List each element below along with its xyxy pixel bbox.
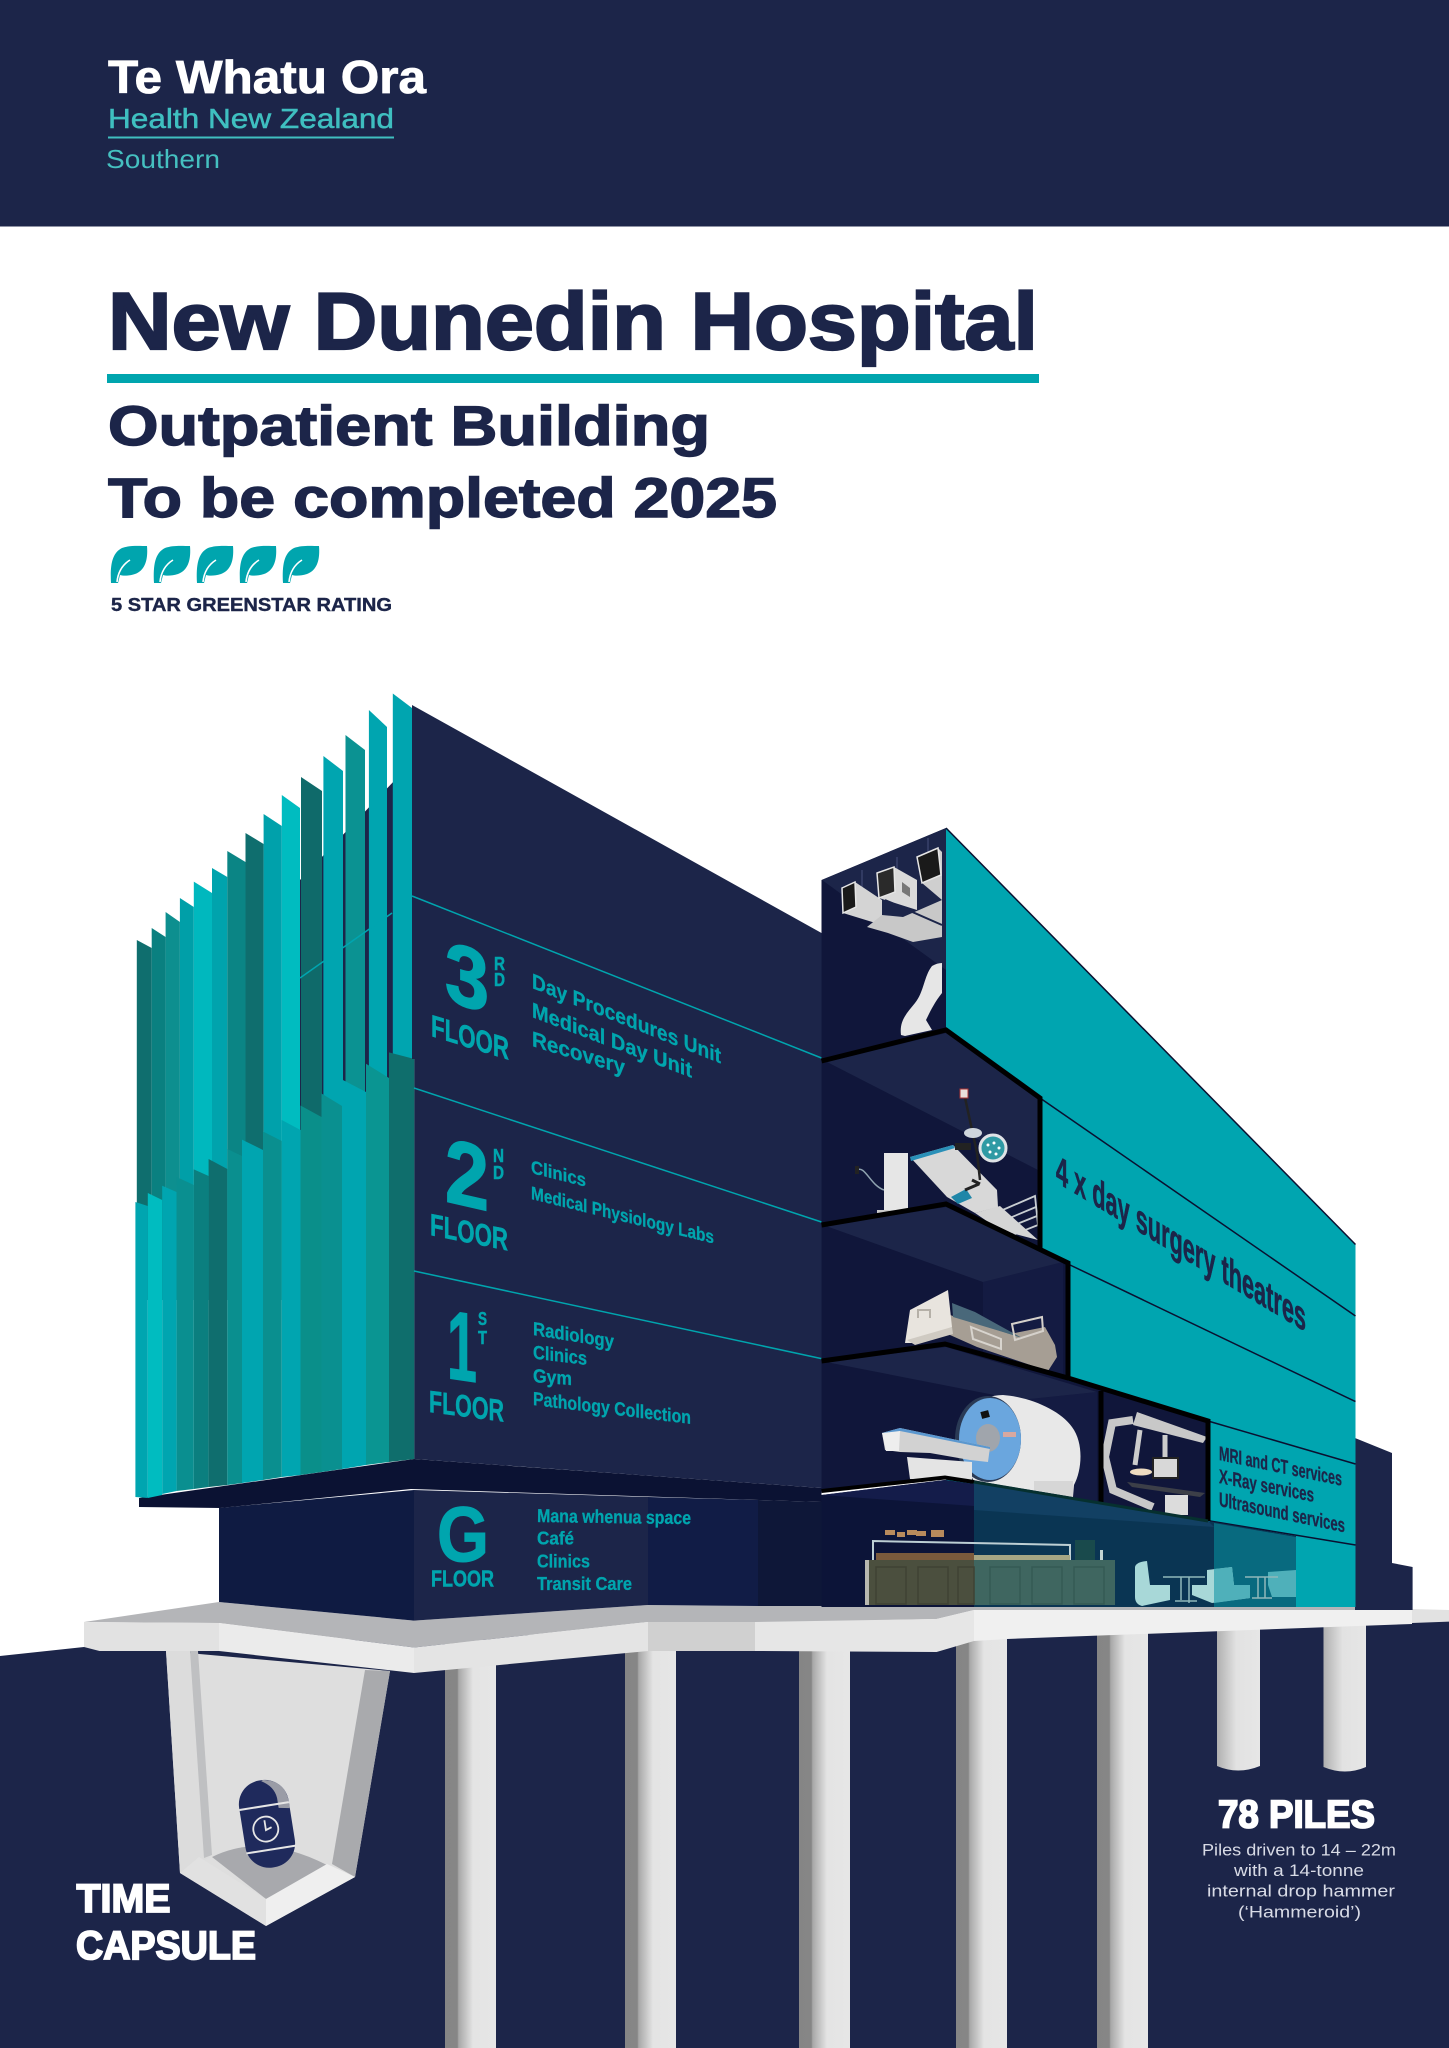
ground floor services	[537, 1505, 691, 1594]
callout: imaging services: MRI and CT services	[1219, 1443, 1342, 1491]
text block: pile description: internal drop hammer	[1207, 1883, 1396, 1901]
title block: To be completed 2025	[108, 466, 777, 529]
first floor label: 1	[447, 1289, 477, 1403]
main navy wall	[412, 705, 822, 1488]
ground floor label: FLOOR	[431, 1566, 494, 1592]
logo: Southern	[106, 144, 220, 174]
building underside	[139, 1459, 822, 1508]
callout: imaging services: X-Ray services	[1219, 1466, 1314, 1507]
text block: pile description: (‘Hammeroid’)	[1238, 1904, 1361, 1922]
room: plant level with ducts	[822, 828, 946, 1061]
ground floor services: Mana whenua space	[537, 1505, 691, 1528]
second floor label: D	[493, 1163, 504, 1183]
icon: café seating	[1135, 1561, 1296, 1606]
building back wing	[1355, 1438, 1413, 1610]
ground floor label: G	[437, 1490, 489, 1578]
icon: five green star leaves	[111, 546, 319, 583]
label: time capsule: CAPSULE	[76, 1924, 256, 1968]
second floor label: 2	[445, 1119, 489, 1231]
icon: café counter	[865, 1530, 1115, 1605]
ground: navy earth	[0, 1610, 1449, 2048]
first floor services: Clinics	[533, 1343, 587, 1370]
second floor services	[531, 1156, 714, 1248]
callout: imaging services: Ultrasound services	[1219, 1489, 1345, 1537]
ground floor services: Clinics	[537, 1550, 590, 1572]
second floor services: Clinics	[531, 1156, 586, 1191]
text block: pile description	[1202, 1842, 1396, 1922]
first floor label: T	[478, 1328, 487, 1348]
piles	[445, 1625, 1366, 2048]
first floor label	[429, 1289, 504, 1429]
logo	[106, 51, 426, 174]
third floor label	[431, 922, 509, 1067]
title block: Outpatient Building	[108, 394, 710, 457]
icon: MRI scanner	[882, 1395, 1080, 1497]
second floor label: N	[493, 1146, 504, 1166]
label: 78 piles: 78 PILES	[1218, 1794, 1375, 1836]
first floor services: Radiology	[533, 1319, 614, 1353]
icon: hospital bed	[905, 1290, 1057, 1371]
third floor services: Medical Day Unit	[532, 998, 693, 1083]
title block	[107, 277, 1039, 529]
ground floor services: Café	[537, 1528, 574, 1548]
room: surgical theatre	[822, 1030, 1040, 1249]
third floor services: Recovery	[532, 1026, 626, 1080]
second floor label	[430, 1119, 508, 1258]
label: time capsule: TIME	[76, 1877, 170, 1921]
facade fins: lower row	[135, 1052, 414, 1498]
icon: operating table and light	[857, 1089, 1038, 1240]
title block: New Dunedin Hospital	[108, 277, 1038, 367]
first floor label: FLOOR	[429, 1384, 504, 1429]
teal end wall	[946, 828, 1356, 1607]
first floor label: S	[478, 1309, 487, 1329]
icon: flexible duct	[901, 963, 942, 1036]
time capsule well	[166, 1651, 390, 1926]
room: MRI and C-arm	[822, 1345, 1208, 1521]
second floor services: Medical Physiology Labs	[531, 1182, 714, 1248]
text block: pile description: Piles driven to 14 – 22m	[1202, 1842, 1396, 1860]
third floor services: Day Procedures Unit	[532, 969, 721, 1069]
first floor services	[533, 1319, 691, 1429]
logo: Te Whatu Ora	[108, 51, 426, 103]
rating caption: 5 STAR GREENSTAR RATING	[111, 594, 392, 615]
structural floor plates	[822, 1030, 1208, 1521]
ground floor box	[219, 1490, 822, 1621]
callout: imaging services	[1219, 1443, 1345, 1537]
facade fins: upper row	[137, 694, 414, 1300]
label: time capsule	[76, 1877, 256, 1968]
third floor label: D	[494, 970, 505, 990]
first floor services: Pathology Collection	[533, 1389, 691, 1429]
icon: ventilation ducts	[842, 838, 942, 942]
header band	[0, 0, 1449, 226]
second floor label: FLOOR	[430, 1207, 508, 1258]
text block: pile description: with a 14-tonne	[1233, 1862, 1364, 1880]
first floor services: Gym	[533, 1366, 572, 1390]
ground floor services: Transit Care	[537, 1573, 632, 1594]
third floor label: 3	[445, 922, 489, 1032]
slab	[84, 1602, 1449, 1673]
room: café with glazing	[822, 1480, 1296, 1607]
icon: C-arm X-ray unit	[1105, 1412, 1207, 1515]
icon: time capsule with clock	[235, 1776, 299, 1871]
logo: Health New Zealand	[108, 103, 394, 134]
room: inpatient bed	[822, 1204, 1068, 1393]
third floor label: FLOOR	[431, 1008, 509, 1067]
third floor label: R	[494, 954, 505, 974]
